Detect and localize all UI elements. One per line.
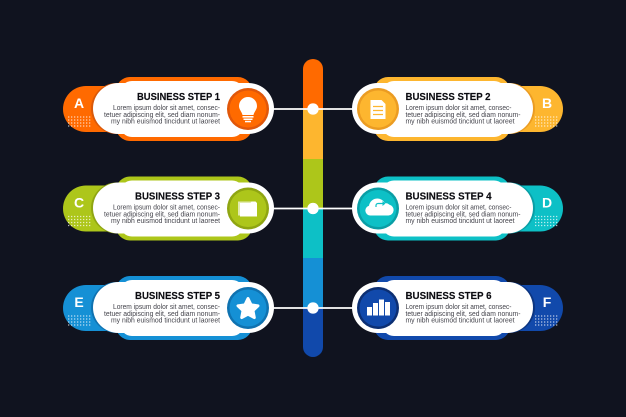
text block: Lorem ipsum dolor sit amet, consec- — [406, 304, 512, 311]
icon: document — [357, 88, 399, 130]
icon: cloud with arrow — [357, 188, 399, 230]
tab: letter C: C — [74, 194, 84, 210]
connector — [313, 108, 354, 110]
text block — [406, 304, 520, 325]
central timeline bar — [303, 59, 323, 357]
tab: letter A: A — [74, 95, 84, 111]
heading: BUSINESS STEP 6 — [406, 291, 492, 302]
panel: business step 4 — [307, 176, 563, 240]
icon: folder — [227, 188, 269, 230]
icon: bar chart — [357, 287, 399, 329]
heading: BUSINESS STEP 1 — [137, 92, 221, 103]
white card — [352, 180, 535, 236]
text block: my nibh euismod tincidunt ut laoreet — [406, 318, 515, 325]
icon: star — [227, 287, 269, 329]
tab: letter F — [483, 285, 563, 331]
panel: business step 2 — [307, 77, 563, 141]
text block — [104, 304, 220, 325]
tab: letter E: E — [74, 294, 84, 310]
node — [307, 302, 319, 314]
text block: tetuer adipiscing elit, sed diam nonum- — [104, 311, 220, 318]
panel: business step 1 — [63, 77, 319, 141]
text block — [406, 204, 520, 225]
white card — [91, 81, 274, 137]
text block: Lorem ipsum dolor sit amet, consec- — [113, 204, 220, 212]
text block: tetuer adipiscing elit, sed diam nonum- — [406, 112, 520, 119]
node — [307, 302, 319, 314]
text block: my nibh euismod tincidunt ut laoreet — [111, 218, 220, 225]
white card — [352, 280, 535, 336]
text block: my nibh euismod tincidunt ut laoreet — [406, 119, 515, 126]
panel: business step 6 — [307, 276, 563, 340]
node — [307, 203, 319, 214]
node — [307, 103, 319, 115]
back plate — [374, 77, 510, 141]
text block: tetuer adipiscing elit, sed diam nonum- — [406, 211, 520, 218]
heading: BUSINESS STEP 5 — [135, 291, 221, 302]
panel: business step 3 — [63, 176, 319, 240]
text block — [104, 204, 220, 225]
text block — [104, 105, 220, 126]
white card — [91, 180, 274, 236]
heading: BUSINESS STEP 4 — [406, 192, 492, 202]
heading: BUSINESS STEP 2 — [406, 92, 491, 103]
text block: my nibh euismod tincidunt ut laoreet — [111, 318, 220, 325]
white card — [352, 81, 535, 137]
text block: Lorem ipsum dolor sit amet, consec- — [406, 204, 512, 212]
text block: tetuer adipiscing elit, sed diam nonum- — [104, 211, 220, 218]
tab: letter B: B — [542, 95, 552, 111]
tab: letter F: F — [543, 294, 552, 310]
white card — [91, 280, 274, 336]
tab: letter A — [63, 86, 143, 132]
text block: Lorem ipsum dolor sit amet, consec- — [406, 105, 512, 112]
back plate — [374, 176, 510, 240]
text block: Lorem ipsum dolor sit amet, consec- — [113, 304, 220, 311]
heading: BUSINESS STEP 3 — [135, 192, 221, 202]
tab: letter E — [63, 285, 143, 331]
tab: letter D — [483, 186, 563, 232]
tab: letter B — [483, 86, 563, 132]
back plate — [116, 276, 252, 340]
back plate — [116, 176, 252, 240]
connector — [272, 307, 313, 309]
tab: letter D: D — [542, 194, 552, 210]
back plate — [374, 276, 510, 340]
connector — [313, 208, 354, 210]
tab: letter C — [63, 186, 143, 232]
connector — [313, 307, 354, 309]
text block: tetuer adipiscing elit, sed diam nonum- — [104, 112, 220, 119]
node — [307, 203, 319, 214]
text block: my nibh euismod tincidunt ut laoreet — [406, 218, 515, 225]
icon: light bulb — [227, 88, 269, 130]
panel: business step 5 — [63, 276, 319, 340]
back plate — [116, 77, 252, 141]
node — [307, 103, 319, 115]
connector — [272, 208, 313, 210]
text block: Lorem ipsum dolor sit amet, consec- — [113, 105, 220, 112]
text block: tetuer adipiscing elit, sed diam nonum- — [406, 311, 520, 318]
text block: my nibh euismod tincidunt ut laoreet — [111, 119, 220, 126]
text block — [406, 105, 520, 126]
connector — [272, 108, 313, 110]
